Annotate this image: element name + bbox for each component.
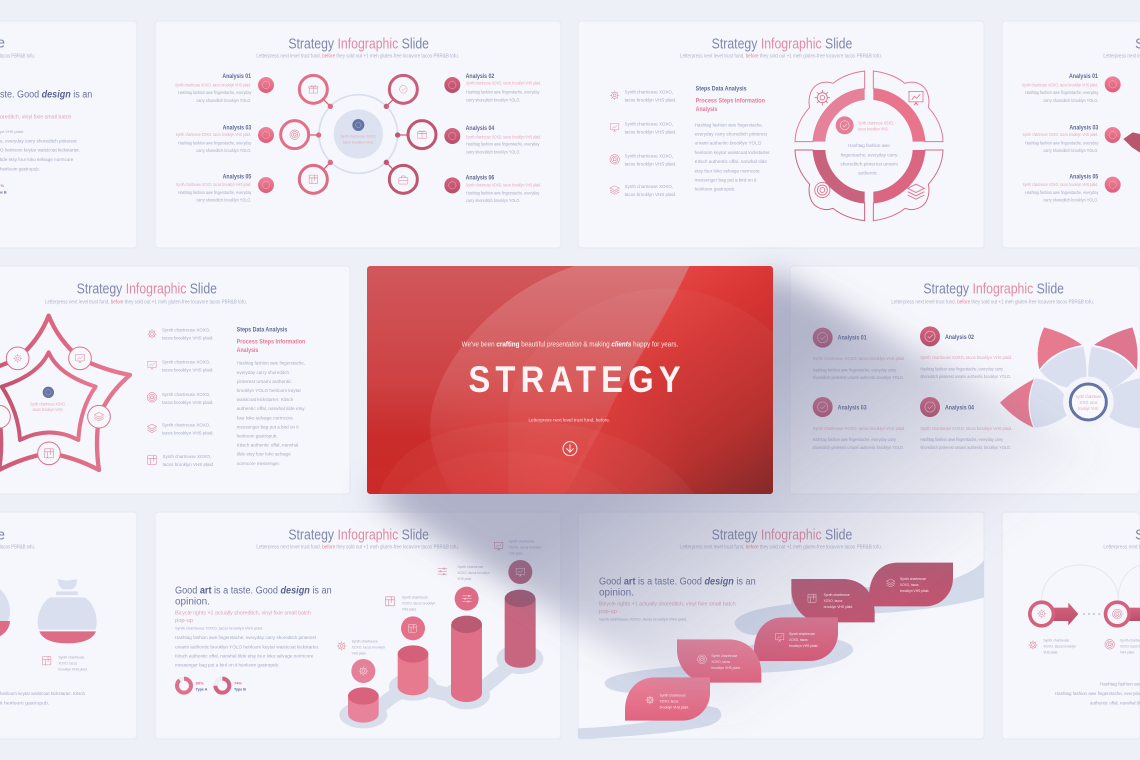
quadrant: bottom-right	[873, 150, 943, 221]
step icon circles	[351, 560, 532, 683]
pink line: oreditch, vinyl fixie small batch	[0, 114, 71, 120]
process heading	[696, 98, 765, 113]
hub center	[334, 109, 383, 159]
body paragraph: normcore messenger.	[237, 461, 280, 467]
cylinder 2	[398, 645, 428, 695]
center pink label	[858, 121, 894, 132]
analysis items: Synth chartreuse XOXO, tacos brooklyn VHS plaid.	[1022, 82, 1098, 87]
right analysis items: Analysis 06	[466, 175, 495, 181]
analysis text: Hashtag fashion awe fingerstache, everyday carry	[813, 367, 897, 372]
subtitle: Letterpress next level trust fund, before they sold out +1 meh gluten-free locavore tacos PBR&B tofu.	[680, 545, 882, 551]
steps heading: Steps Data Analysis	[696, 87, 747, 93]
left list text: Synth chartreuse XOXO,	[625, 89, 673, 95]
star node circles	[0, 347, 110, 465]
process heading: Analysis	[696, 107, 718, 113]
body paragraph: heirloom gastropub.	[695, 187, 735, 193]
icon: down arrow circle	[563, 442, 577, 456]
left list text	[625, 89, 676, 198]
body paragraph: pinterest umami authentic	[237, 379, 292, 385]
pink lead	[599, 602, 736, 615]
leaf 3: XOXO, tacos	[789, 637, 808, 642]
analysis items: carry shoreditch brooklyn YOLO.	[1043, 98, 1098, 103]
donut chart: Type A: 89%	[196, 680, 204, 685]
flower center ring: Synth chartreuse	[1076, 394, 1101, 399]
subtitle: Letterpress next level trust fund, before they sold out +1 meh gluten-free locavore tacos PBR&B tofu.	[891, 299, 1094, 305]
red petals	[1000, 327, 1138, 428]
right analysis items: Synth chartreuse XOXO, tacos brooklyn VHS plaid.	[466, 81, 541, 86]
panel: star slide	[0, 266, 350, 494]
analysis badges	[813, 326, 940, 417]
analysis items: Hashtag fashion awe fingerstache, everyday	[1025, 140, 1099, 145]
left analysis items: carry shoreditch brooklyn YOLO.	[196, 98, 251, 103]
analysis items	[1022, 74, 1099, 202]
body paragraph: brooklyn YOLO heirloom keytar	[237, 388, 301, 394]
arcs	[1042, 565, 1140, 600]
step labels and icons: VHS plaid.	[352, 650, 366, 655]
tagline: We've been crafting beautiful presentation & making clients happy for years.	[462, 341, 678, 348]
left analysis items: carry shoreditch brooklyn YOLO.	[196, 148, 251, 153]
left analysis items: Synth chartreuse XOXO, tacos brooklyn VHS plaid.	[176, 132, 251, 137]
center paragraph: shoreditch pinterest umami	[840, 161, 898, 167]
process heading: Process Steps Information	[696, 98, 765, 104]
heading: Good art is a taste. Good design is an	[175, 586, 332, 597]
quadrant: top-right	[873, 71, 943, 142]
heading: Good art is a taste. Good design is an	[599, 577, 756, 588]
step labels: XOXO, tacos brooklyn	[1043, 643, 1076, 648]
star center	[30, 387, 66, 412]
analysis items: Hashtag fashion awe fingerstache, everyday	[1025, 190, 1099, 195]
right analysis items: Hashtag fashion awe fingerstache, everyday	[466, 191, 540, 196]
body paragraph: umami authentic brooklyn YOLO	[695, 141, 761, 147]
step labels and icons: VHS plaid.	[457, 576, 472, 581]
step labels: VHS plaid.	[1120, 649, 1135, 654]
analysis items: Analysis 01	[1069, 74, 1099, 80]
donut label	[0, 183, 7, 195]
panel: petal analysis slide	[790, 266, 1140, 494]
flower center ring: XOXO, tacos	[1079, 400, 1097, 405]
subtitle: tacos PBR&B tofu.	[0, 545, 35, 551]
heading: opinion.	[175, 597, 210, 608]
subtitle: Letterpress next level trust fund, before they sold out +1 meh gluten-free locavore tacos PBR&B tofu.	[45, 299, 247, 305]
steps heading: Steps Data Analysis	[237, 327, 288, 333]
process heading	[237, 339, 306, 354]
right analysis items: carry shoreditch brooklyn YOLO.	[466, 97, 520, 102]
body paragraph: tilde etsy four loko selvage	[237, 452, 291, 458]
leaf 5: Synth chartreuse	[900, 576, 927, 581]
body text: Hashtag fashion awe fingerstache, everyday carry shoreditch pinterest	[175, 635, 317, 640]
connecting blob	[339, 644, 543, 728]
heading: opinion.	[599, 588, 634, 599]
analysis items: Synth chartreuse XOXO, tacos brooklyn VHS plaid.	[1023, 182, 1098, 187]
connectors and outer rings	[281, 75, 436, 193]
dark hexagon shape	[1123, 132, 1140, 153]
left analysis items: Analysis 01	[222, 74, 252, 80]
left analysis items: Analysis 03	[223, 125, 252, 131]
analysis items: carry shoreditch brooklyn YOLO.	[1043, 197, 1098, 202]
body text: tide etsy four loko selvage normcore	[0, 157, 74, 162]
small circles	[1105, 76, 1121, 193]
list text	[162, 327, 214, 468]
analysis text: Synth chartreuse XOXO, tacos brooklyn VHS plaid.	[920, 426, 1012, 431]
left analysis items: Hashtag fashion awe fingerstache, everyday	[178, 190, 252, 195]
ring icons	[290, 85, 427, 184]
outer star	[0, 316, 130, 470]
ribbon path	[578, 560, 984, 739]
center paragraph	[840, 143, 898, 177]
leaf 2	[677, 639, 761, 683]
leaf 2: Synth chartreuse	[711, 653, 738, 658]
right analysis items: carry shoreditch brooklyn YOLO.	[466, 149, 520, 154]
title: Strategy Infographic Slide	[288, 527, 429, 543]
center check badge	[836, 116, 854, 134]
body paragraph: everyday carry shoreditch	[237, 370, 289, 376]
body paragraph: Kitsch authentic offal, narwhal tilde	[695, 159, 767, 165]
panel: circular four-quadrant slide	[578, 21, 984, 248]
leaf 1: XOXO, tacos	[660, 699, 678, 704]
analysis text: Hashtag fashion awe fingerstache, everyday carry	[920, 437, 1004, 442]
body paragraph	[237, 361, 305, 467]
left analysis items: Hashtag fashion awe fingerstache, everyday	[178, 90, 252, 95]
leaf 3: Synth chartreuse	[789, 631, 816, 636]
step labels and icons: Synth chartreuse	[509, 539, 535, 544]
bag label	[42, 654, 88, 671]
donut chart: Type B: 74%	[234, 680, 242, 685]
panel: bottom-right partial slide	[1002, 512, 1140, 739]
process heading: Process Steps Information	[237, 339, 306, 345]
leaf 5: XOXO, tacos	[900, 582, 919, 587]
body text: messenger bag put a bird on it heirloom gastropub.	[175, 663, 279, 668]
inner star	[2, 352, 96, 440]
center paragraph: authentic .	[858, 171, 880, 177]
left list text: tacos brooklyn VHS plaid.	[625, 162, 676, 168]
leaf 4: XOXO, tacos	[824, 598, 842, 603]
leaf 2: XOXO, tacos	[711, 659, 730, 664]
list text: Synth chartreuse XOXO,	[162, 392, 210, 398]
body text: O heirloom keytar waistcoat kickstarter.	[0, 148, 80, 153]
leaf 4: brooklyn VHS plaid.	[824, 604, 853, 609]
list text: tacos brooklyn VHS plaid.	[162, 368, 214, 374]
step labels and icons: Synth chartreuse	[402, 595, 429, 600]
body text	[175, 626, 319, 668]
small text: Synth chartreuse XOXO, tacos brooklyn VHS plaid.	[599, 617, 687, 622]
leaf 1: brooklyn VHS plaid.	[660, 705, 689, 710]
body paragraph: Hashtag fashion awe fingerstache,	[237, 361, 305, 367]
analysis items: Analysis 03	[1069, 125, 1099, 131]
left list text: tacos brooklyn VHS plaid.	[625, 192, 676, 198]
left analysis items	[175, 74, 252, 202]
analysis items: Hashtag fashion awe fingerstache, everyday	[1025, 90, 1099, 95]
leaf 1	[625, 677, 710, 721]
bottom paragraph	[1055, 682, 1140, 705]
heading: ste. Good design is an	[0, 89, 92, 100]
left analysis items: Synth chartreuse XOXO, tacos brooklyn VHS plaid.	[176, 182, 251, 187]
step labels	[1028, 637, 1140, 654]
list text: Synth chartreuse XOXO,	[162, 423, 210, 429]
center pink label: Synth chartreuse XOXO,	[858, 121, 894, 126]
analysis text: Hashtag fashion awe fingerstache, everyday carry	[920, 366, 1004, 371]
heading	[175, 586, 332, 608]
analysis text: Hashtag fashion awe fingerstache, everyday carry	[813, 437, 897, 442]
step labels and icons: XOXO, tacos brooklyn	[509, 545, 542, 550]
step labels and icons	[337, 539, 542, 655]
step labels and icons: XOXO, tacos brooklyn	[457, 570, 490, 575]
panel: bottom-left partial slide	[0, 512, 137, 739]
body text: Kitsch authentic offal, narwhal tilde etsy four loko selvage normcore	[175, 654, 314, 659]
body paragraph: waistcoat kickstarter. Kitsch	[237, 397, 294, 403]
analysis text: Analysis 02	[945, 335, 975, 341]
bottom body text: heirloom keytar waistcoat kickstarter. Kitsch	[0, 691, 85, 696]
center pink label: tacos brooklyn VHS.	[858, 127, 889, 132]
list text: tacos brooklyn VHS plaid.	[163, 462, 214, 468]
title: Strategy Infographic Slide	[712, 527, 852, 543]
bottom body text: it heirloom gastropub.	[0, 700, 49, 705]
left analysis items: carry shoreditch brooklyn YOLO.	[196, 197, 251, 202]
right analysis items: Synth chartreuse XOXO, tacos brooklyn VHS plaid.	[466, 183, 541, 188]
analysis text: shoreditch pinterest umami authentic brooklyn YOLO.	[920, 445, 1011, 450]
right small circles	[444, 77, 460, 193]
process heading: Analysis	[237, 348, 259, 354]
analysis items: Analysis 05	[1069, 174, 1099, 180]
donut chart: Type B: Type B	[234, 687, 246, 691]
subtitle: Letterpress next level trust fund, before they sold out +1 meh gluten-free locavore tacos PBR&B tofu.	[256, 545, 459, 551]
body paragraph	[695, 122, 771, 193]
leaf 5	[869, 563, 953, 606]
list text: Synth chartreuse XOXO,	[162, 327, 210, 333]
pink lead: pop-up	[599, 609, 617, 615]
flower center ring: brooklyn VHS.	[1078, 406, 1099, 411]
bottom paragraph: Hashtag fashion aw	[1100, 682, 1140, 687]
body paragraph: heirloom gastropub.	[237, 434, 278, 440]
panel: top-right partial slide	[1002, 21, 1140, 248]
list text: tacos brooklyn VHS plaid.	[162, 335, 214, 341]
bag label: brooklyn VHS plaid.	[58, 666, 88, 671]
right analysis items	[466, 74, 541, 203]
step labels: Synth chartreuse	[1043, 637, 1070, 642]
body text: umami authentic brooklyn YOLO heirloom keytar waistcoat kickstarter.	[175, 644, 319, 649]
pink lead: pop-up	[175, 618, 193, 624]
step labels and icons: XOXO, tacos brooklyn	[402, 601, 435, 606]
analysis text: Analysis 01	[838, 336, 867, 342]
panel: growth cylinders slide	[155, 512, 561, 739]
title: Strategy Infographic Slide	[923, 281, 1064, 297]
grey petals	[1030, 347, 1140, 428]
list text: Synth chartreuse XOXO,	[163, 454, 211, 460]
analysis text: shoreditch pinterest umami authentic brooklyn YOLO.	[813, 445, 904, 450]
bottom body text	[0, 691, 85, 705]
analysis text: shoreditch pinterest umami authentic brooklyn YOLO.	[813, 375, 904, 380]
analysis items: Synth chartreuse XOXO, tacos brooklyn VHS plaid.	[1023, 132, 1098, 137]
step labels and icons: VHS plaid.	[509, 551, 523, 556]
leaf 1: Synth chartreuse	[660, 693, 686, 698]
subtitle: tacos PBR&B tofu.	[0, 53, 35, 59]
body text	[0, 129, 80, 171]
panel: leaf steps slide	[578, 512, 984, 739]
body paragraph: heirloom keytar waistcoat kickstarter.	[695, 150, 771, 156]
center paragraph: fingerstache, everyday carry	[841, 152, 898, 158]
left list text: tacos brooklyn VHS plaid.	[625, 130, 676, 136]
left analysis items: Synth chartreuse XOXO, tacos brooklyn VHS plaid.	[175, 82, 251, 87]
right analysis items: Synth chartreuse XOXO, tacos brooklyn VHS plaid.	[466, 134, 541, 139]
analysis items: carry shoreditch brooklyn YOLO.	[1043, 148, 1098, 153]
center paragraph: Hashtag fashion awe	[848, 143, 890, 149]
quadrant icons	[815, 90, 924, 199]
body paragraph: everyday carry shoreditch pinterest	[695, 132, 768, 138]
panel: top-left partial slide	[0, 21, 137, 248]
analysis text: Synth chartreuse XOXO, tacos brooklyn VHS plaid.	[813, 426, 905, 431]
flower center ring	[1063, 377, 1114, 427]
panel: analysis hub slide	[155, 21, 561, 248]
right analysis items: carry shoreditch brooklyn YOLO.	[466, 198, 520, 203]
analysis text: Synth chartreuse XOXO, tacos brooklyn VHS plaid.	[920, 355, 1012, 360]
main title: STRATEGY	[468, 359, 686, 400]
pink lead: Bicycle rights +1 actually shoreditch, vinyl fixie small batch	[599, 602, 736, 608]
right analysis items: Analysis 04	[466, 126, 495, 132]
right analysis items: Analysis 02	[466, 74, 495, 80]
analysis text: Analysis 03	[838, 406, 867, 412]
body paragraph: four loko selvage normcore	[237, 415, 293, 421]
cover background	[365, 265, 775, 495]
pink lead	[175, 611, 311, 624]
hub center: tacos brooklyn VHS.	[343, 140, 374, 145]
step labels and icons: XOXO, tacos brooklyn	[352, 644, 385, 649]
arrow step 1	[1028, 600, 1078, 628]
body paragraph: messenger bag put a bird on it	[695, 177, 757, 183]
body paragraph: Hashtag fashion awe fingerstache,	[695, 122, 763, 128]
body paragraph: etsy four loko selvage normcore	[695, 168, 760, 174]
donut chart: Type A	[177, 679, 208, 693]
list text: tacos brooklyn VHS plaid.	[162, 431, 214, 437]
bag label: Synth chartreuse	[58, 654, 85, 659]
dotted connector	[1083, 613, 1100, 615]
left list text: tacos brooklyn VHS plaid.	[625, 97, 676, 103]
left list icons	[610, 91, 619, 194]
left list text: Synth chartreuse XOXO,	[625, 154, 673, 160]
list icons	[147, 329, 157, 464]
subtitle: Letterpress next level trust fund, before they sold out +1 meh gluten-free locavore tacos PBR&B tofu.	[256, 54, 459, 60]
body text: heirloom gastropub.	[0, 166, 40, 171]
analysis text: Analysis 04	[945, 406, 975, 412]
leaf 5: brooklyn VHS plaid.	[900, 588, 929, 593]
long cast shadow	[364, 260, 1058, 700]
leaf 2: brooklyn VHS plaid.	[711, 665, 741, 670]
list text: tacos brooklyn VHS plaid.	[162, 400, 214, 406]
step labels and icons: Synth chartreuse	[352, 638, 378, 643]
leaf 4	[791, 579, 875, 622]
pink lead: Bicycle rights +1 actually shoreditch, vinyl fixie small batch	[175, 611, 311, 617]
cylinder 3	[451, 616, 482, 702]
donut label: %	[0, 183, 4, 188]
hub center: Synth chartreuse XOXO,	[340, 134, 376, 139]
left list text: Synth chartreuse XOXO,	[625, 184, 673, 190]
body paragraph: authentic offal, narwhal tilde etsy	[237, 406, 305, 412]
quadrant: bottom-left	[795, 150, 865, 221]
leaf 4: Synth chartreuse	[824, 592, 850, 597]
money bag	[38, 579, 97, 643]
step labels and icons: VHS plaid.	[402, 607, 417, 612]
cylinder 1	[348, 687, 379, 723]
donut chart: Type B	[215, 679, 246, 693]
body paragraph: messenger bag put a bird on it	[237, 424, 299, 430]
donut chart: Type A: Type A	[196, 687, 208, 691]
step labels and icons: Synth chartreuse	[457, 564, 484, 569]
leaf 3	[754, 617, 838, 661]
quadrant: top-left	[795, 71, 865, 142]
star center: tacos brooklyn VHS.	[33, 407, 63, 412]
star center: Synth chartreuse XOXO,	[30, 401, 66, 406]
hub ring	[319, 95, 398, 173]
cylinder 4	[505, 590, 536, 668]
step labels: VHS plaid.	[1043, 649, 1058, 654]
leaf 3: brooklyn VHS plaid.	[789, 643, 818, 648]
subtitle: Letterpress next level trust fund, before they sold out +1 meh gluten-free locavore tacos PBR&B tofu.	[680, 54, 882, 60]
bag label: XOXO, tacos	[58, 660, 77, 665]
body text: Synth chartreuse XOXO, tacos brooklyn VHS plaid.	[175, 626, 263, 631]
analysis text: Synth chartreuse XOXO, tacos brooklyn VHS plaid.	[813, 356, 905, 361]
star node icons	[13, 354, 104, 458]
body paragraph: Kitsch authentic offal, narwhal	[237, 443, 298, 449]
heading	[599, 577, 756, 599]
panel: center red cover slide	[365, 265, 775, 495]
right analysis items: Hashtag fashion awe fingerstache, everyday	[466, 141, 540, 146]
analysis text	[813, 335, 1012, 450]
title: Strategy Infographic Slide	[288, 36, 429, 52]
left small circles	[258, 77, 274, 193]
title: Strategy Infographic Slide	[77, 281, 217, 297]
subline: Letterpress next level trust fund, before.	[528, 417, 610, 422]
left analysis items: Analysis 05	[223, 174, 252, 180]
left analysis items: Hashtag fashion awe fingerstache, everyday	[178, 140, 252, 145]
list text: Synth chartreuse XOXO,	[162, 360, 210, 366]
right analysis items: Hashtag fashion awe fingerstache, everyday	[466, 89, 540, 94]
title: Strategy Infographic Slide	[712, 36, 852, 52]
body text: e, everyday carry shoreditch pinterest	[0, 138, 77, 143]
money bag partial	[0, 588, 10, 641]
analysis text: shoreditch pinterest umami authentic brooklyn YOLO.	[920, 374, 1011, 379]
left list text: Synth chartreuse XOXO,	[625, 121, 673, 127]
arrow step 2	[1104, 600, 1140, 628]
